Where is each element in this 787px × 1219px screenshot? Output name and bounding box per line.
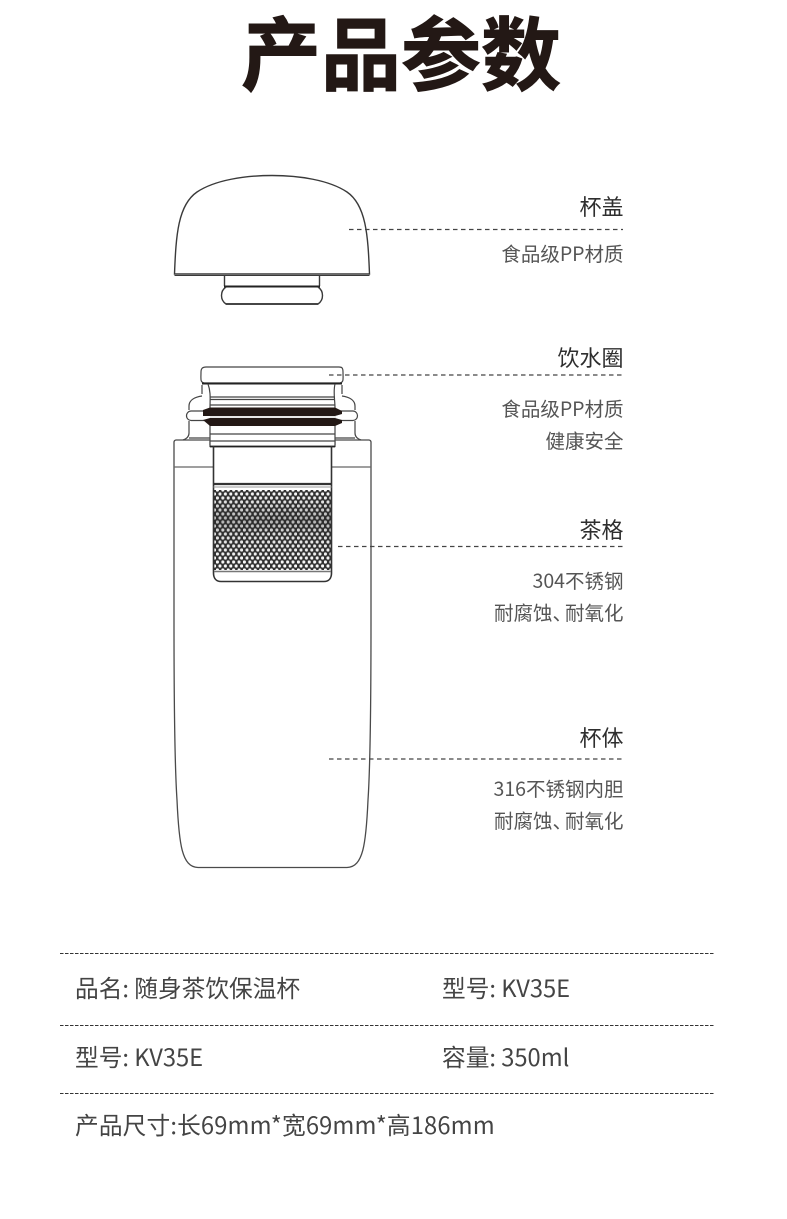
label: strainer: 茶格 (579, 512, 624, 544)
label: drinking ring: 饮水圈 (557, 341, 624, 373)
callout line: body (329, 758, 623, 760)
label: body: 杯体 (579, 721, 624, 753)
icon: tea strainer (214, 446, 332, 582)
icon: cup lid (174, 176, 370, 304)
icon: cup body (174, 440, 371, 868)
callout line: lid (349, 228, 623, 230)
spec: model second: 型号: KV35E (75, 1039, 203, 1073)
spec: capacity: 容量: 350ml (442, 1039, 569, 1073)
lid material: 食品级PP材质 (501, 238, 624, 267)
spec: product name: 品名: 随身茶饮保温杯 (75, 970, 300, 1004)
body note: 耐腐蚀、耐氧化 (494, 805, 624, 834)
callout line: strainer (338, 546, 623, 548)
spec: size: 产品尺寸:长69mm*宽69mm*高186mm (75, 1107, 495, 1141)
icon: drinking ring and neck (183, 367, 361, 446)
ring note: 健康安全 (545, 425, 624, 454)
strainer note: 耐腐蚀、耐氧化 (494, 597, 624, 626)
label: lid: 杯盖 (579, 190, 624, 222)
strainer material: 304不锈钢 (533, 565, 624, 594)
ring material: 食品级PP材质 (501, 393, 624, 422)
spec: model: 型号: KV35E (442, 970, 570, 1004)
callout line: drinking ring (329, 374, 623, 376)
body material: 316不锈钢内胆 (494, 773, 624, 802)
